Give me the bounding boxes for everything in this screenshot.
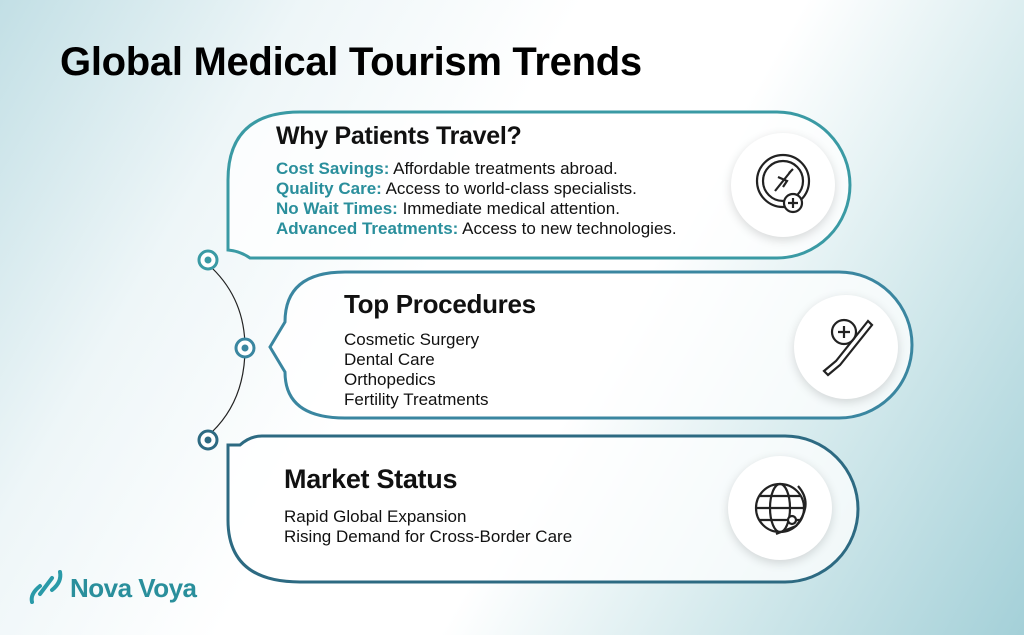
- market list: [284, 507, 572, 546]
- reasons list: Advanced Treatments: Access to new technologies.: [276, 219, 677, 238]
- title: Global Medical Tourism Trends: [60, 40, 642, 84]
- heading: Top Procedures: [344, 289, 536, 319]
- procedures list: [344, 330, 489, 409]
- panel: why patients travel: [276, 122, 677, 238]
- market list: Rising Demand for Cross-Border Care: [284, 527, 572, 546]
- procedures list: Dental Care: [344, 350, 435, 369]
- panel: market status: [284, 464, 572, 546]
- procedures list: Orthopedics: [344, 370, 436, 389]
- reasons list: [276, 159, 677, 238]
- logo: Nova Voya: [70, 572, 197, 602]
- reasons list: No Wait Times: Immediate medical attention.: [276, 199, 620, 218]
- heading: Market Status: [284, 464, 457, 494]
- icon: globe plane cross: [731, 133, 835, 237]
- icon: scalpel cross: [794, 295, 898, 399]
- reasons list: Quality Care: Access to world-class specialists.: [276, 179, 637, 198]
- market list: Rapid Global Expansion: [284, 507, 466, 526]
- logo: [30, 570, 198, 604]
- icon: globe: [728, 456, 832, 560]
- reasons list: Cost Savings: Affordable treatments abroad.: [276, 159, 618, 178]
- panel: top procedures: [344, 289, 536, 409]
- procedures list: Cosmetic Surgery: [344, 330, 479, 349]
- procedures list: Fertility Treatments: [344, 390, 489, 409]
- heading: Why Patients Travel?: [276, 122, 521, 150]
